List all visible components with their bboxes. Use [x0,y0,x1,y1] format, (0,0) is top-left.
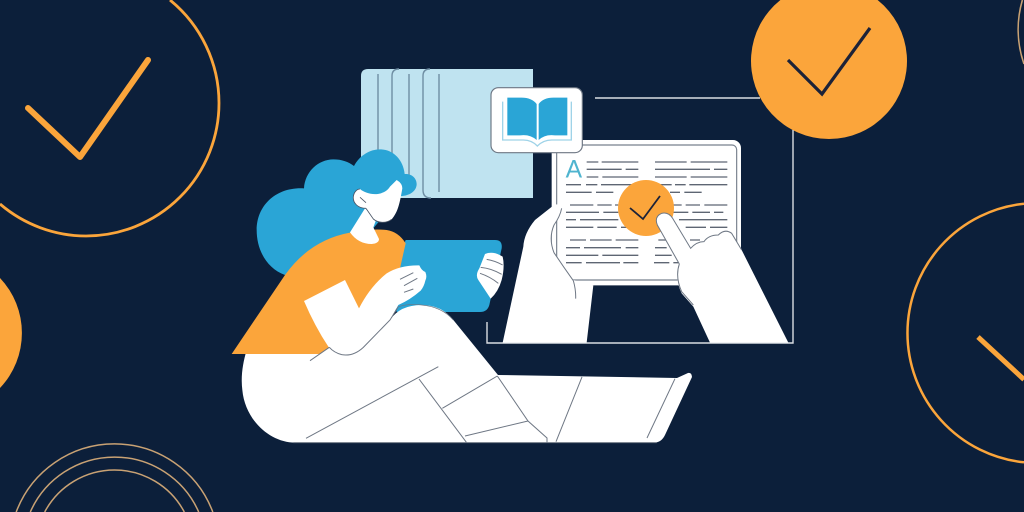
partial ring, top right corner [1018,0,1024,64]
trousers and legs [242,305,692,443]
orange check badge, top right [751,0,907,139]
text lines on the tablet page [566,162,727,263]
large outlined check badge, top left [0,0,219,236]
tablet device [393,240,502,312]
ear and jaw lines [353,189,392,222]
concentric rings, bottom left [16,444,213,512]
letter A: A [566,156,583,183]
reading tablet with text lines [552,140,741,285]
far hand [477,253,504,299]
orange check circle on tablet [618,180,674,236]
hair [257,149,417,275]
thin frame around the reading scene [487,98,793,343]
face [353,180,402,222]
book icon tile [491,88,582,153]
arm and hand [304,265,426,355]
outlined check badge, right edge [907,204,1024,462]
knee outline [398,304,453,320]
trouser seam lines [293,367,675,443]
stacked pale blue pages [361,69,533,198]
neck [350,208,379,244]
book icon [503,98,571,146]
orange circle, left edge [0,278,22,388]
arm and finger lines [310,273,417,361]
right hand pointing at check [656,213,788,343]
shirt [232,230,406,354]
left hand holding tablet [503,204,593,343]
woman reading on a tablet [232,149,692,443]
